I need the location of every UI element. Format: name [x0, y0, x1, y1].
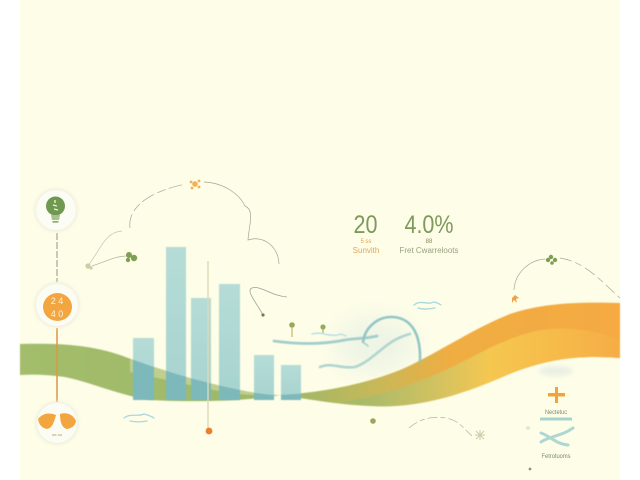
legend right	[540, 387, 573, 460]
icon: green clover	[546, 255, 557, 265]
icon: orange sprig	[512, 295, 519, 303]
statistic: 4.0%: 4.0%	[404, 211, 454, 239]
wave band	[20, 303, 620, 406]
legend right: Fetrotuoms	[542, 453, 571, 460]
icon: pale leaf	[85, 263, 93, 270]
icon: small burst	[475, 430, 485, 440]
small squiggle	[250, 287, 287, 315]
legend right: Nectetuc	[545, 410, 567, 416]
wave inner stripe	[340, 329, 620, 406]
soft glow behind arch	[335, 317, 415, 373]
icon: butterfly badge: aa aa	[52, 432, 63, 437]
icon: lightbulb badge	[34, 188, 78, 232]
teal arch and river lines	[274, 317, 420, 367]
dashed connector right	[514, 258, 620, 298]
dashed cloud connector	[88, 182, 279, 266]
dashed connector bottom	[409, 417, 472, 436]
statistic: 4.0%	[400, 211, 458, 255]
statistic: 20	[353, 211, 379, 255]
icon: orange badge: 2 4	[51, 296, 63, 306]
statistic: 4.0%: Fret Cwarreloots	[400, 246, 458, 255]
statistic: 20: 5 ss	[360, 239, 372, 245]
icon: butterfly badge	[36, 402, 78, 444]
statistic: 20: Sunvith	[353, 246, 379, 255]
bar chart	[133, 247, 301, 400]
trees	[289, 322, 376, 424]
icon: orange badge: 4 0	[51, 309, 63, 319]
vertical timeline line	[56, 233, 58, 402]
bar overlap with wave	[132, 360, 302, 400]
icon: green leaf cluster	[126, 252, 137, 262]
icon: orange badge	[34, 282, 80, 328]
icon: orange sprout top	[190, 180, 200, 189]
vertical pin marker	[206, 261, 212, 434]
ripples top right	[414, 302, 441, 309]
ripples bottom left	[124, 414, 154, 422]
wave pale top fold	[130, 359, 280, 395]
statistic: 20: 20	[354, 211, 378, 239]
icon: teal cross	[541, 428, 573, 445]
icon: orange cross	[548, 387, 565, 403]
soft shadow under wave	[539, 366, 573, 376]
statistic: 4.0%: 88	[426, 239, 433, 245]
